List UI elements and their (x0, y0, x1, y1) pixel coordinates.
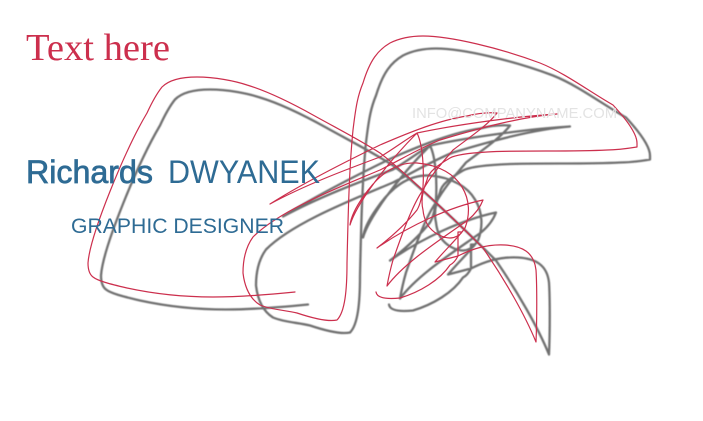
email address: INFO@COMPANYNAME.COM (412, 105, 617, 122)
signature: red scribble (88, 36, 637, 342)
title: Text here (26, 27, 170, 69)
last name: DWYANEK (168, 154, 320, 190)
first name: Richards (26, 154, 153, 190)
job title: GRAPHIC DESIGNER (71, 215, 284, 238)
signature shadow: gray scribble (101, 48, 650, 354)
